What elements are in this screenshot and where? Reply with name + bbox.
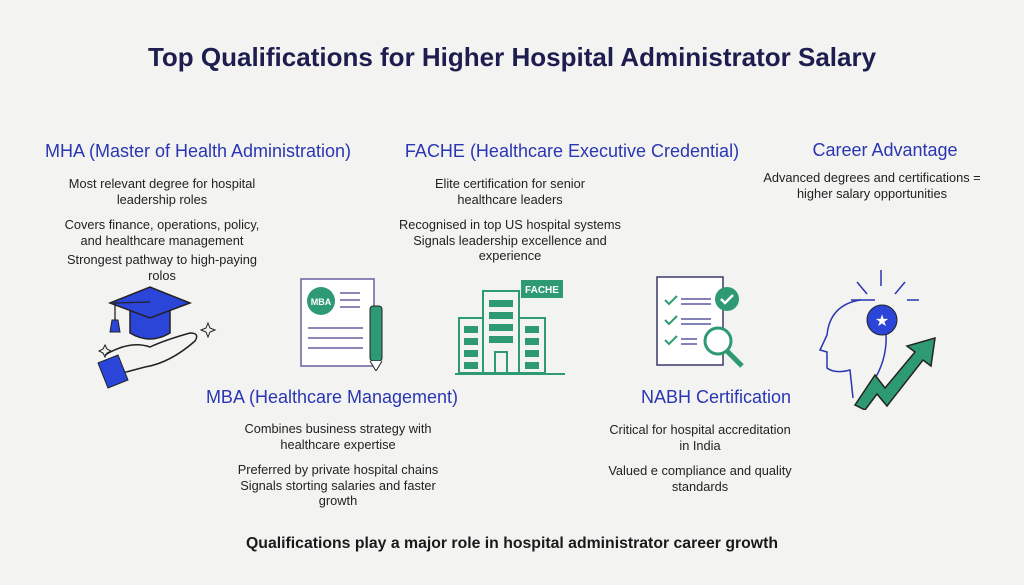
icon: head with badge and arrow: ★ xyxy=(875,313,889,330)
text: MHA points: Most relevant degree for hospital xyxy=(69,176,255,191)
text: Career points xyxy=(763,170,981,200)
icon: head with badge and arrow xyxy=(819,270,936,410)
text: FACHE points: Signals leadership excellence and xyxy=(413,232,607,248)
icon: checklist with magnifier xyxy=(656,276,744,368)
icon: grad cap in hand xyxy=(97,286,216,389)
heading: Career Advantage: Career Advantage xyxy=(812,140,958,160)
text: NABH points: Critical for hospital accreditation xyxy=(609,422,791,437)
text: NABH points: in India xyxy=(679,438,721,452)
footer: Qualifications play a major role in hospital administrator career growth xyxy=(246,535,778,552)
text: NABH points: standards xyxy=(672,478,728,494)
text: NABH points xyxy=(608,422,792,494)
text: MHA points: and healthcare management xyxy=(81,232,243,248)
icon: MBA document: MBA xyxy=(311,297,332,307)
text: MHA points: Covers finance, operations, policy, xyxy=(65,217,259,232)
text: FACHE points: healthcare leaders xyxy=(457,192,563,206)
text: MBA points: healthcare expertise xyxy=(280,436,396,452)
text: FACHE points: Elite certification for senior xyxy=(435,176,585,191)
text: MHA points xyxy=(65,176,259,282)
text: Career points: higher salary opportunities xyxy=(797,186,947,200)
text: MHA points: rolos xyxy=(148,268,176,282)
icon: MBA document xyxy=(300,278,382,371)
heading: FACHE: FACHE (Healthcare Executive Credential) xyxy=(405,141,739,161)
heading: MBA: MBA (Healthcare Management) xyxy=(206,387,458,407)
text: MHA points: Strongest pathway to high-paying xyxy=(67,252,257,267)
text: FACHE points: Recognised in top US hospital systems xyxy=(399,217,621,232)
text: FACHE points xyxy=(399,176,621,263)
text: Career points: Advanced degrees and certifications = xyxy=(763,170,981,185)
text: MBA points: Combines business strategy with xyxy=(244,421,432,436)
text: MBA points xyxy=(238,421,438,508)
text: MHA points: leadership roles xyxy=(117,192,207,206)
text: FACHE points: experience xyxy=(479,248,541,263)
text: MBA points: Signals storting salaries and faster xyxy=(240,478,436,492)
text: NABH points: Valued e compliance and quality xyxy=(608,463,792,478)
heading: MHA: MHA (Master of Health Administration) xyxy=(45,141,351,161)
text: MBA points: growth xyxy=(319,493,357,508)
text: MBA points: Preferred by private hospital chains xyxy=(238,462,438,477)
icon: FACHE building: FACHE xyxy=(525,285,559,296)
title: Top Qualifications for Higher Hospital Administrator Salary xyxy=(148,42,876,72)
heading: NABH: NABH Certification xyxy=(641,387,791,407)
icon: FACHE building xyxy=(455,280,565,375)
